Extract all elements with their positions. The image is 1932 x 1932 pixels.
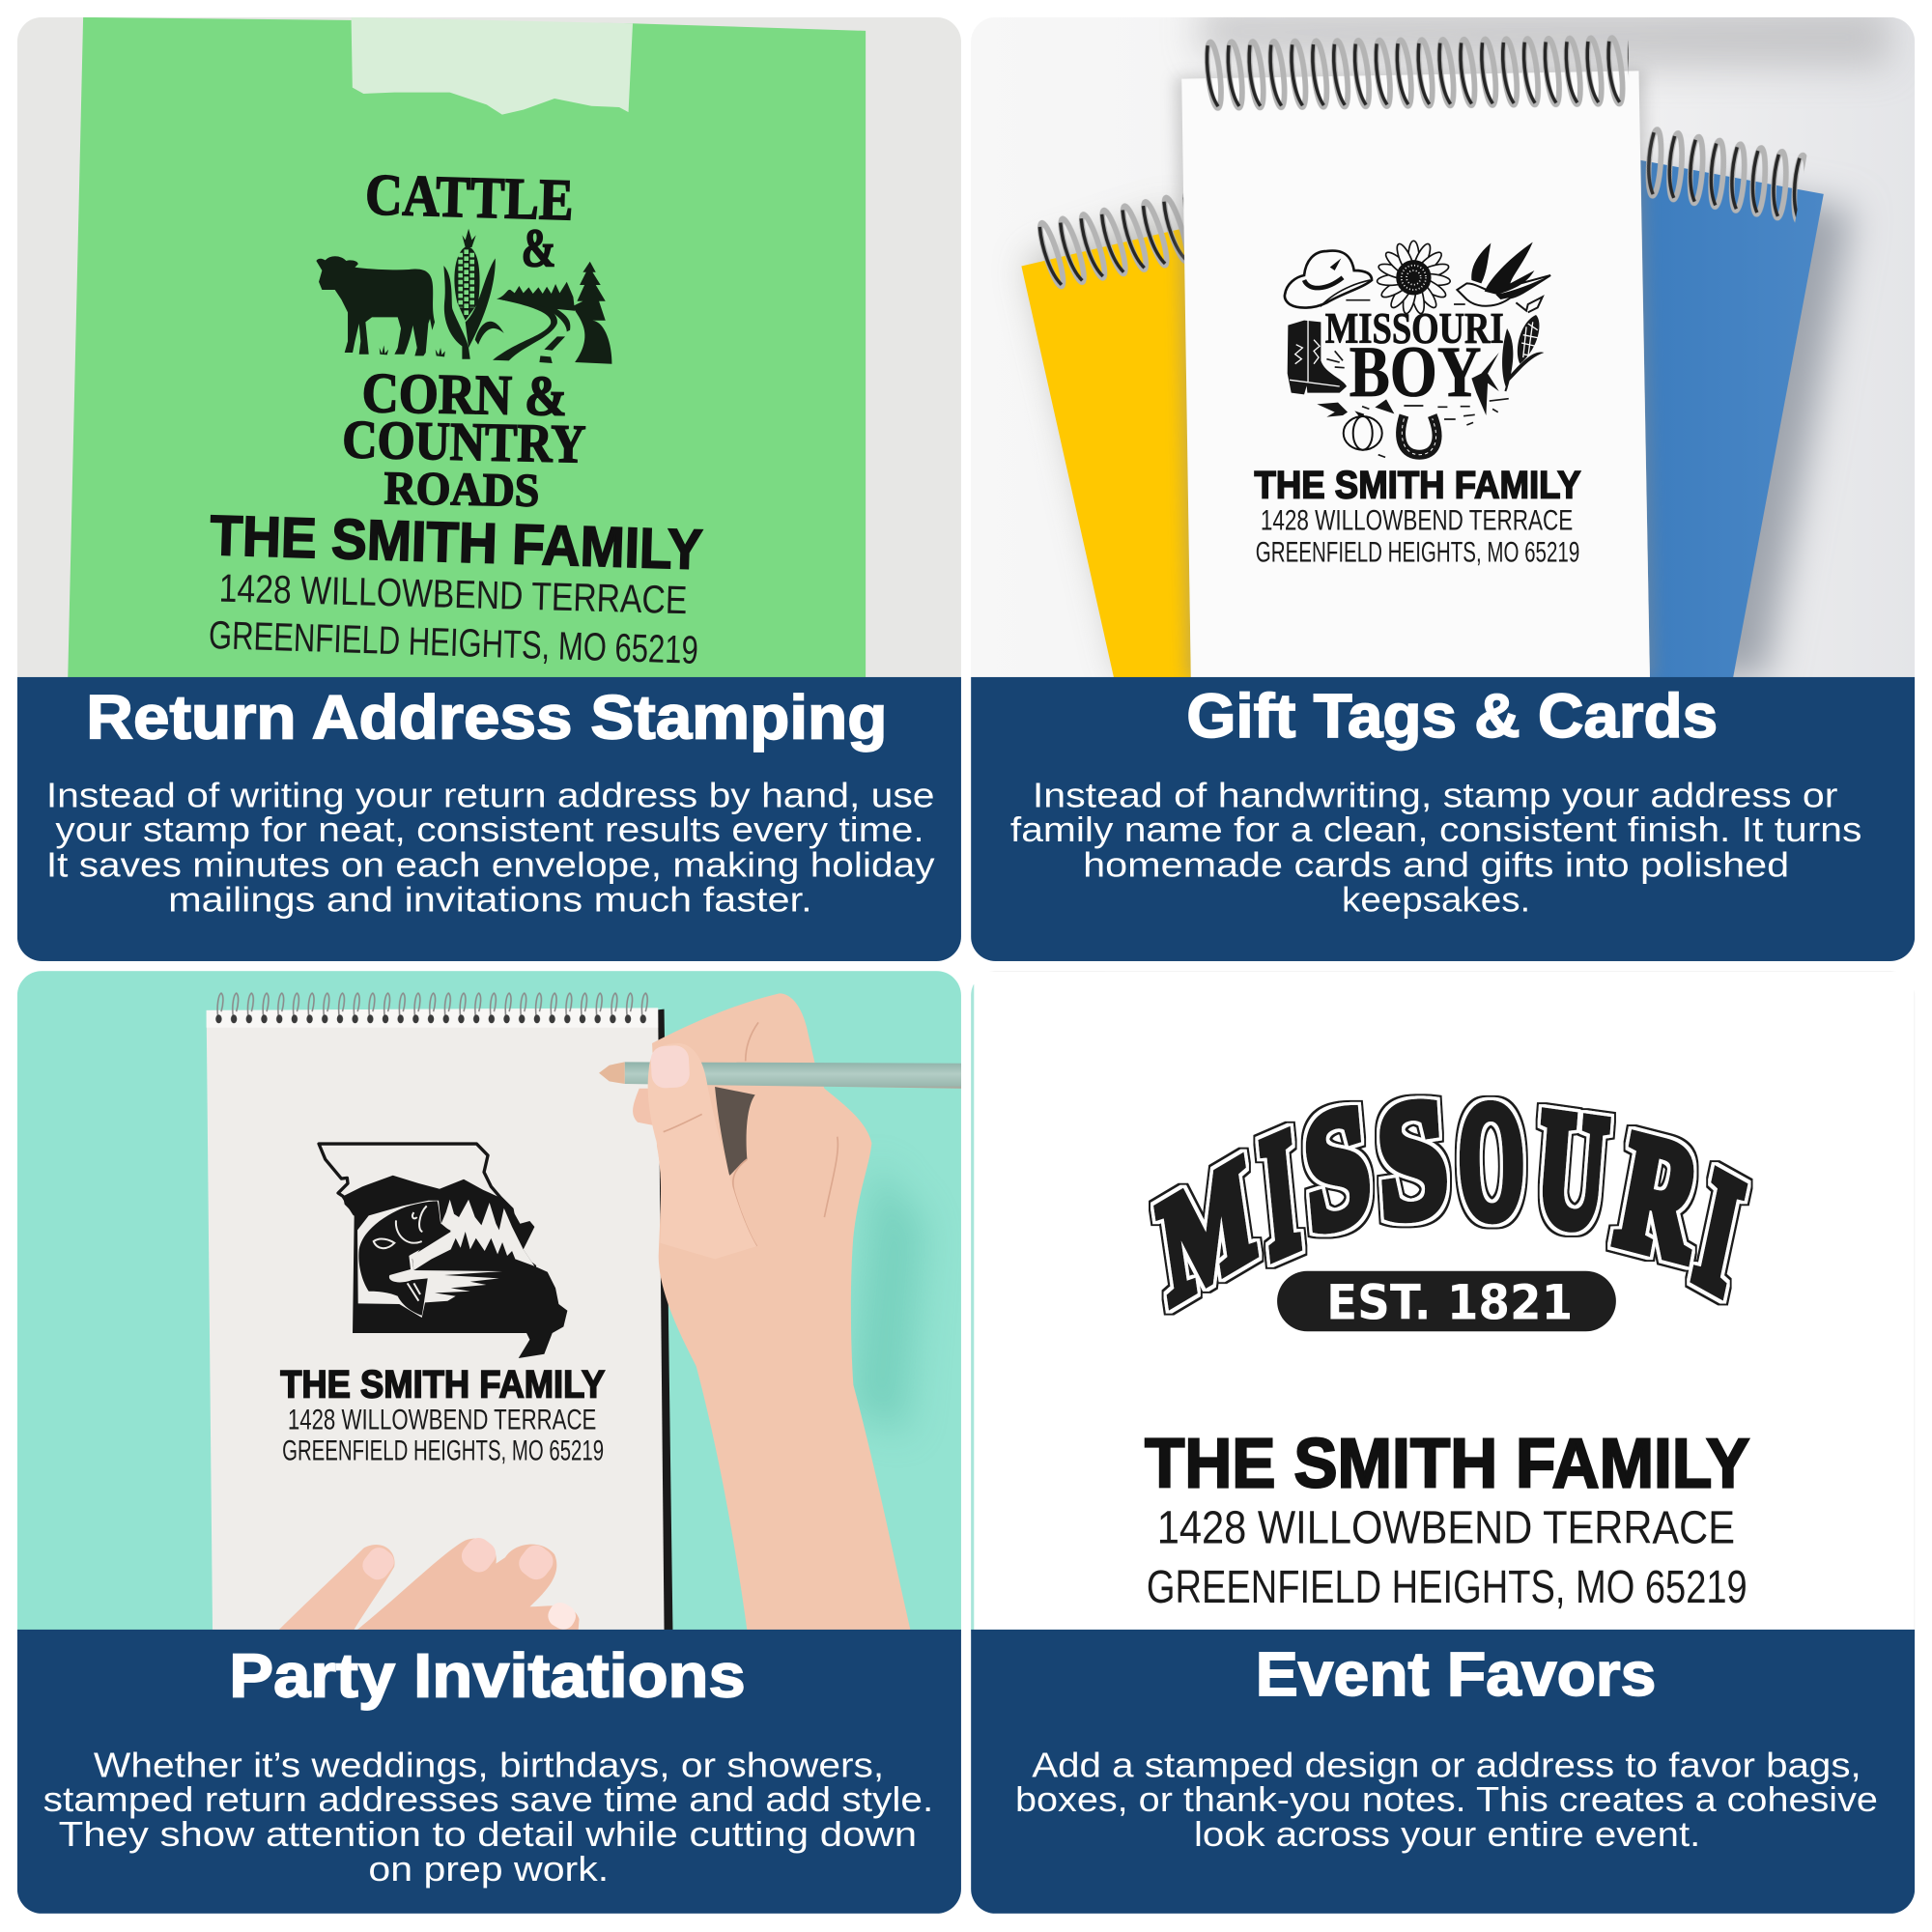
stamp: missouri boy xyxy=(1285,241,1550,457)
photo: three spiral notebooks xyxy=(971,6,1915,683)
gap between thumb and palm xyxy=(715,1087,755,1176)
stamp lower heading text xyxy=(344,373,585,507)
arched word: missouri: I xyxy=(1256,1094,1305,1294)
sky and forest cutout xyxy=(412,1200,534,1270)
stamp address text xyxy=(280,1363,605,1467)
description: on prep work. xyxy=(368,1850,609,1889)
icon: grass tufts xyxy=(380,345,445,356)
stamp address text: THE SMITH FAMILY xyxy=(1145,1425,1749,1503)
panel: party invitations xyxy=(17,971,961,1914)
icon: pine tree xyxy=(573,262,611,364)
icon: cowboy hat xyxy=(1285,251,1372,308)
stamp heading: missouri boy: MISSOURI xyxy=(1325,304,1504,353)
description: It saves minutes on each envelope, making holiday xyxy=(46,846,935,885)
stamp address text: GREENFIELD HEIGHTS, MO 65219 xyxy=(282,1435,604,1467)
panel: return address stamping xyxy=(17,17,961,961)
stamp address text: GREENFIELD HEIGHTS, MO 65219 xyxy=(208,612,699,672)
icon: winding road xyxy=(493,282,575,363)
description xyxy=(1015,1746,1878,1854)
icon: leaf sprig and leaf xyxy=(1317,399,1394,417)
fingernails xyxy=(358,1533,580,1634)
description xyxy=(43,1746,933,1889)
icon: small swallow xyxy=(1471,353,1499,415)
map landscape silhouette xyxy=(343,1176,567,1358)
pencil xyxy=(599,1062,961,1089)
stamp address text: GREENFIELD HEIGHTS, MO 65219 xyxy=(1147,1561,1747,1613)
writing hand with pencil xyxy=(599,993,961,1642)
back of hand and wrist xyxy=(652,993,913,1642)
stamp lower heading text: COUNTRY xyxy=(342,410,586,475)
description: Instead of writing your return address by hand, use xyxy=(46,777,935,815)
arched word: missouri: O xyxy=(1458,1070,1525,1253)
heading: Event Favors xyxy=(1256,1639,1656,1709)
icons: cow, corn, road, tree xyxy=(316,229,611,364)
description: homemade cards and gifts into polished xyxy=(1083,846,1789,885)
icon: corn xyxy=(1502,297,1544,391)
description: mailings and invitations much faster. xyxy=(168,880,812,919)
stamp heading text: CATTLE xyxy=(364,162,575,233)
badge: est. 1821: EST. 1821 xyxy=(1326,1274,1573,1330)
stamp heading text xyxy=(367,174,572,268)
stamp address text: 1428 WILLOWBEND TERRACE xyxy=(1261,505,1573,537)
photo: hands writing on spiral notepad xyxy=(17,971,961,1642)
description: keepsakes. xyxy=(1342,880,1530,919)
lower hand fingers xyxy=(274,1533,580,1634)
description xyxy=(46,777,935,919)
stamp lower heading text: ROADS xyxy=(384,463,540,517)
description: stamped return addresses save time and add style. xyxy=(43,1780,933,1819)
stamp dashes xyxy=(1326,300,1509,457)
stamp heading: missouri boy: BOY xyxy=(1350,332,1481,412)
stamp: cattle corn and country roads xyxy=(208,162,703,672)
caption band xyxy=(971,677,1915,961)
caption band xyxy=(17,1630,961,1914)
icon: horseshoe xyxy=(1401,415,1437,455)
blue notebook xyxy=(1637,124,1824,678)
stamp address text: 1428 WILLOWBEND TERRACE xyxy=(1157,1502,1735,1554)
heading: Return Address Stamping xyxy=(86,683,887,753)
fingernail xyxy=(650,1045,691,1089)
stamp address text: THE SMITH FAMILY xyxy=(1254,464,1581,506)
description: look across your entire event. xyxy=(1194,1815,1700,1854)
caption band xyxy=(17,677,961,961)
panel: event favors xyxy=(971,971,1915,1914)
stamp address text xyxy=(1254,464,1581,569)
stamp address text: GREENFIELD HEIGHTS, MO 65219 xyxy=(1256,537,1579,569)
arched word: missouri xyxy=(1151,1065,1754,1335)
description: They show attention to detail while cutting down xyxy=(59,1815,917,1854)
stamp address text xyxy=(1145,1425,1749,1613)
white stamp artwork xyxy=(971,971,1915,1636)
icon: corn xyxy=(443,229,504,359)
knuckle crease xyxy=(664,1114,702,1132)
arched word: missouri: S xyxy=(1298,1067,1376,1268)
stamp heading text: & xyxy=(522,219,555,279)
icon: sunflower xyxy=(1377,241,1451,315)
description: Instead of handwriting, stamp your address or xyxy=(1033,777,1838,815)
skin creases xyxy=(733,1022,838,1246)
white notebook xyxy=(1181,33,1650,678)
description xyxy=(1010,777,1861,919)
stamp: missouri fish map xyxy=(319,1144,567,1358)
icon: cowboy boot xyxy=(1288,319,1347,394)
icon: pumpkin xyxy=(1344,413,1382,450)
description: family name for a clean, consistent finish. It turns xyxy=(1010,810,1861,849)
description: your stamp for neat, consistent results every time. xyxy=(55,810,924,849)
stamp address text xyxy=(211,514,703,665)
notepad xyxy=(207,992,672,1632)
stamp address text: THE SMITH FAMILY xyxy=(209,504,703,582)
arched word: missouri: S xyxy=(1374,1065,1451,1256)
thumb xyxy=(648,1043,756,1259)
stamp heading: missouri boy xyxy=(1325,313,1503,397)
caption band xyxy=(971,1630,1915,1914)
arched word: missouri: M xyxy=(1151,1125,1262,1335)
photo: green paper on grey background xyxy=(17,17,961,683)
fingertip behind pencil xyxy=(633,1089,654,1125)
arched word: missouri: R xyxy=(1606,1100,1713,1294)
map outline xyxy=(319,1144,534,1272)
icon: cow xyxy=(316,256,435,355)
arched word: missouri: U xyxy=(1532,1075,1612,1264)
stamp address text: 1428 WILLOWBEND TERRACE xyxy=(288,1405,596,1436)
stamp address text: 1428 WILLOWBEND TERRACE xyxy=(218,566,688,622)
description: boxes, or thank-you notes. This creates a cohesive xyxy=(1015,1780,1878,1819)
icon: swallow xyxy=(1457,242,1550,306)
stamp lower heading text: CORN & xyxy=(361,361,568,428)
masking tape xyxy=(352,17,633,115)
description: Add a stamped design or address to favor bags, xyxy=(1032,1746,1861,1784)
stamp address text: THE SMITH FAMILY xyxy=(280,1363,605,1406)
fish xyxy=(358,1201,451,1316)
heading: Gift Tags & Cards xyxy=(1186,681,1718,751)
description: Whether it’s weddings, birthdays, or showers, xyxy=(94,1746,884,1784)
water and fish halo cutout xyxy=(357,1201,502,1318)
arched word: missouri: I xyxy=(1685,1134,1754,1329)
heading: Party Invitations xyxy=(229,1640,746,1710)
yellow notebook xyxy=(1021,188,1200,678)
panel: gift tags and cards xyxy=(971,6,1915,961)
